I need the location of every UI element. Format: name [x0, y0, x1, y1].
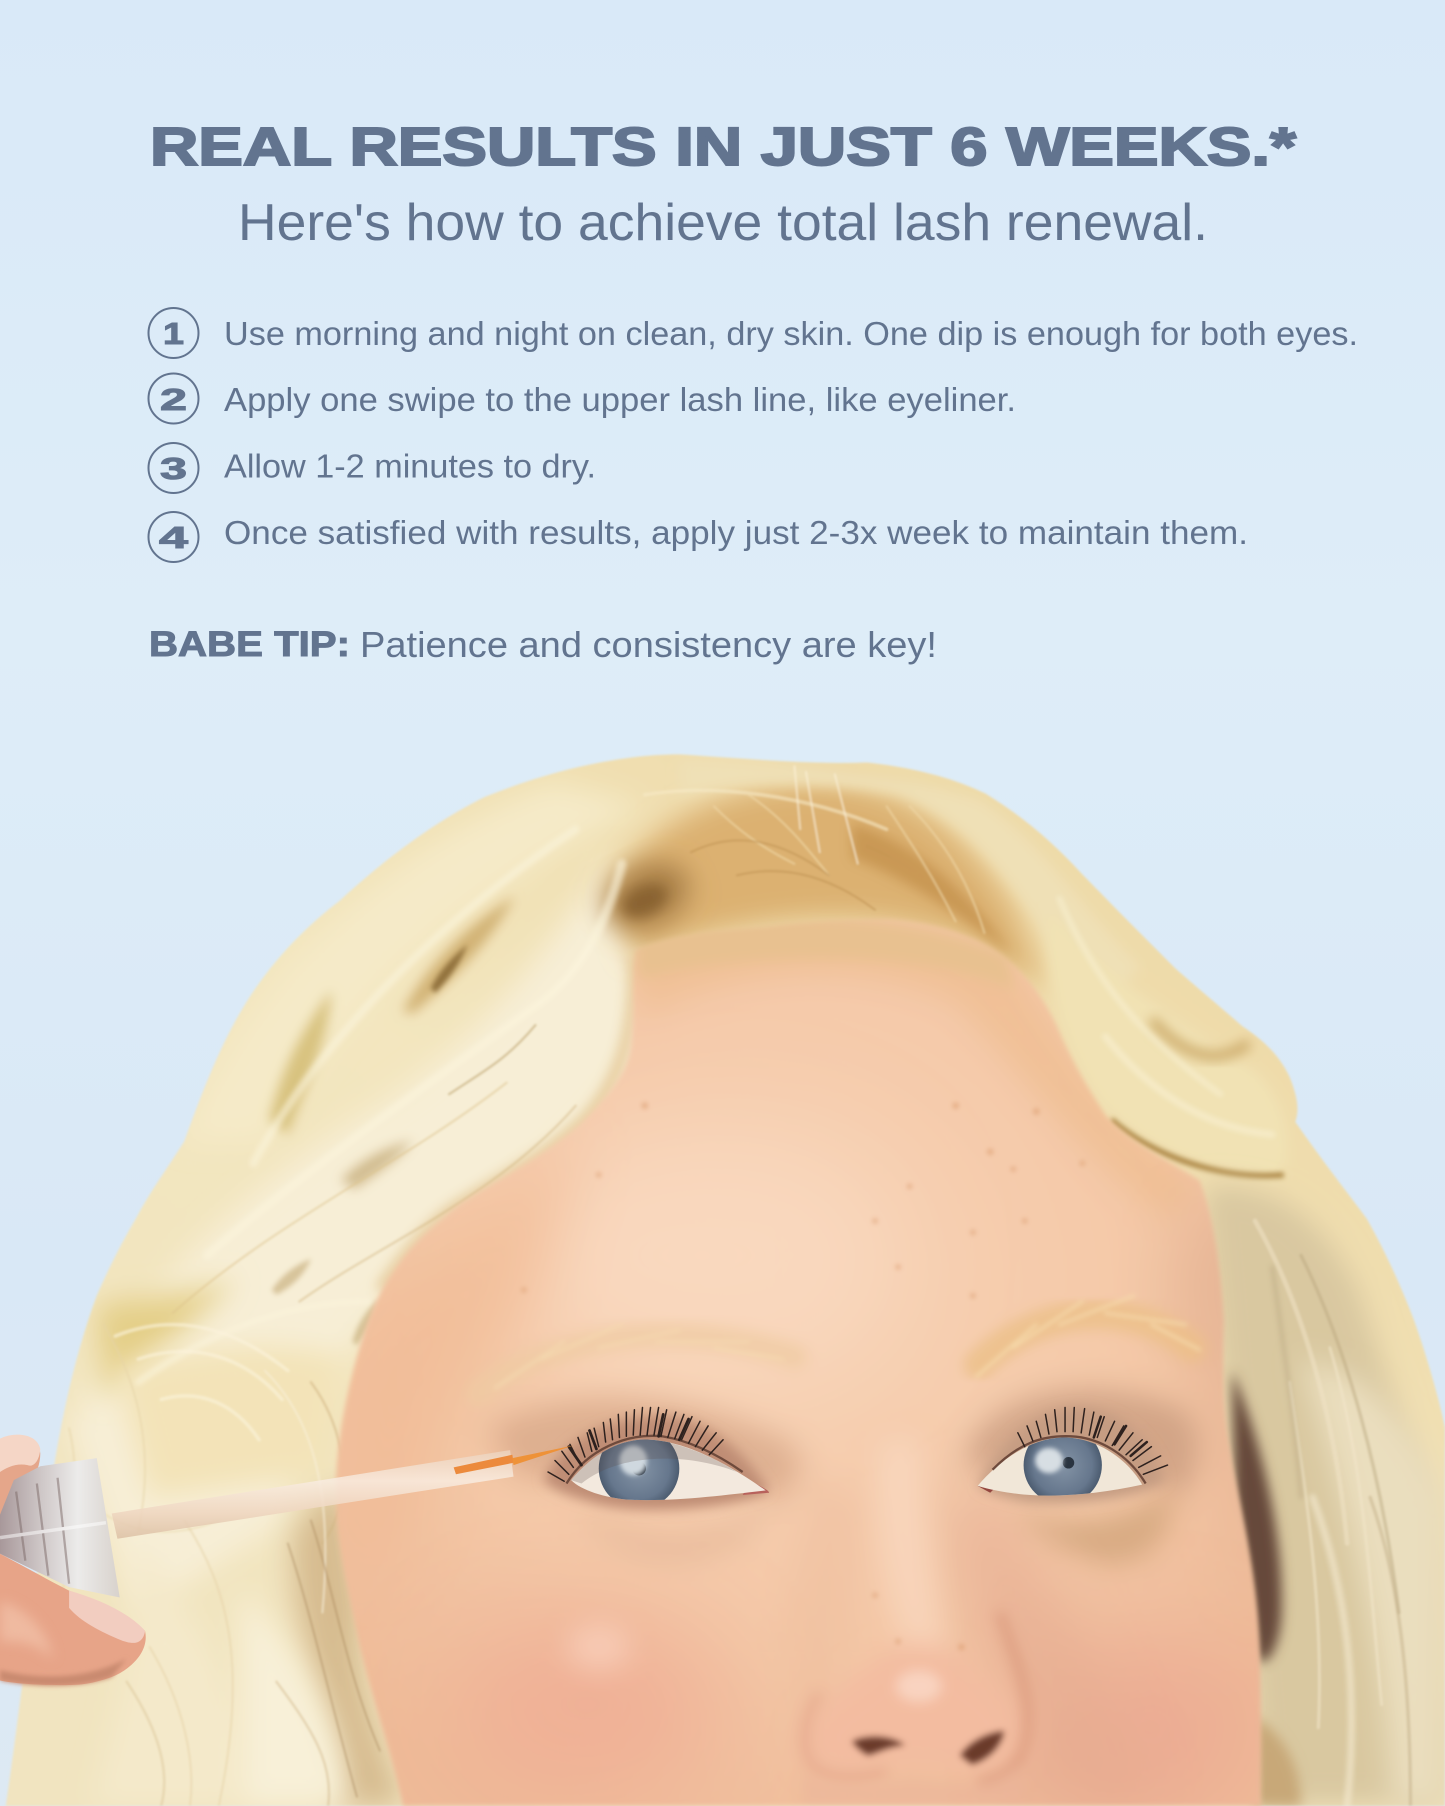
title: REAL RESULTS IN JUST 6 WEEKS.*	[150, 117, 1296, 177]
hairline warm shade	[636, 959, 1183, 1208]
hair	[6, 754, 1445, 1806]
cap ridges	[0, 1478, 106, 1584]
nose	[800, 1613, 1028, 1806]
dropper bottle cap	[0, 1458, 120, 1598]
step 3: Allow 1-2 minutes to dry.	[224, 448, 596, 486]
hair tone regions	[224, 782, 625, 1121]
babe tip: Patience and consistency are key!	[360, 624, 937, 665]
step 1	[148, 308, 1358, 358]
eye socket left	[489, 1398, 799, 1497]
orange applicator tip	[454, 1446, 573, 1474]
step 1: 1	[163, 316, 184, 351]
steps list	[148, 308, 1358, 562]
fingers	[0, 1435, 40, 1532]
lashes right	[1018, 1407, 1168, 1474]
step 2	[148, 374, 1016, 424]
step 4: Once satisfied with results, apply just 2-3x week to maintain them.	[224, 515, 1248, 552]
step 2: 2	[160, 382, 187, 417]
left eyebrow	[478, 1325, 794, 1394]
eye left	[543, 1416, 769, 1510]
hair strands	[58, 766, 1410, 1806]
face	[322, 898, 1278, 1806]
forehead highlight	[540, 1132, 856, 1373]
subtitle: Here's how to achieve total lash renewal.	[238, 194, 1208, 252]
step 4	[148, 512, 1248, 562]
step 1: Use morning and night on clean, dry skin. One dip is enough for both eyes.	[224, 316, 1358, 353]
photo: woman applying lash serum	[0, 754, 1445, 1806]
babe tip: BABE TIP:	[149, 625, 350, 664]
temple shade left	[371, 1166, 574, 1458]
eye right	[978, 1407, 1165, 1504]
lashes left	[548, 1407, 723, 1481]
step 4: 4	[159, 520, 189, 555]
under eye shadows	[672, 1540, 711, 1551]
step 2: Apply one swipe to the upper lash line, like eyeliner.	[224, 382, 1016, 419]
step 3	[148, 443, 596, 493]
thumb	[0, 1554, 146, 1686]
nose bridge and sides	[786, 1474, 864, 1728]
cheek right	[1093, 1634, 1238, 1802]
right eyebrow	[976, 1296, 1200, 1376]
temple shade right	[1173, 1222, 1224, 1418]
babe tip	[149, 624, 937, 665]
step 3: 3	[160, 451, 187, 486]
dropper tube	[112, 1450, 514, 1539]
eye socket right	[967, 1389, 1198, 1497]
freckles	[521, 1102, 1085, 1651]
cheek left	[449, 1613, 725, 1797]
